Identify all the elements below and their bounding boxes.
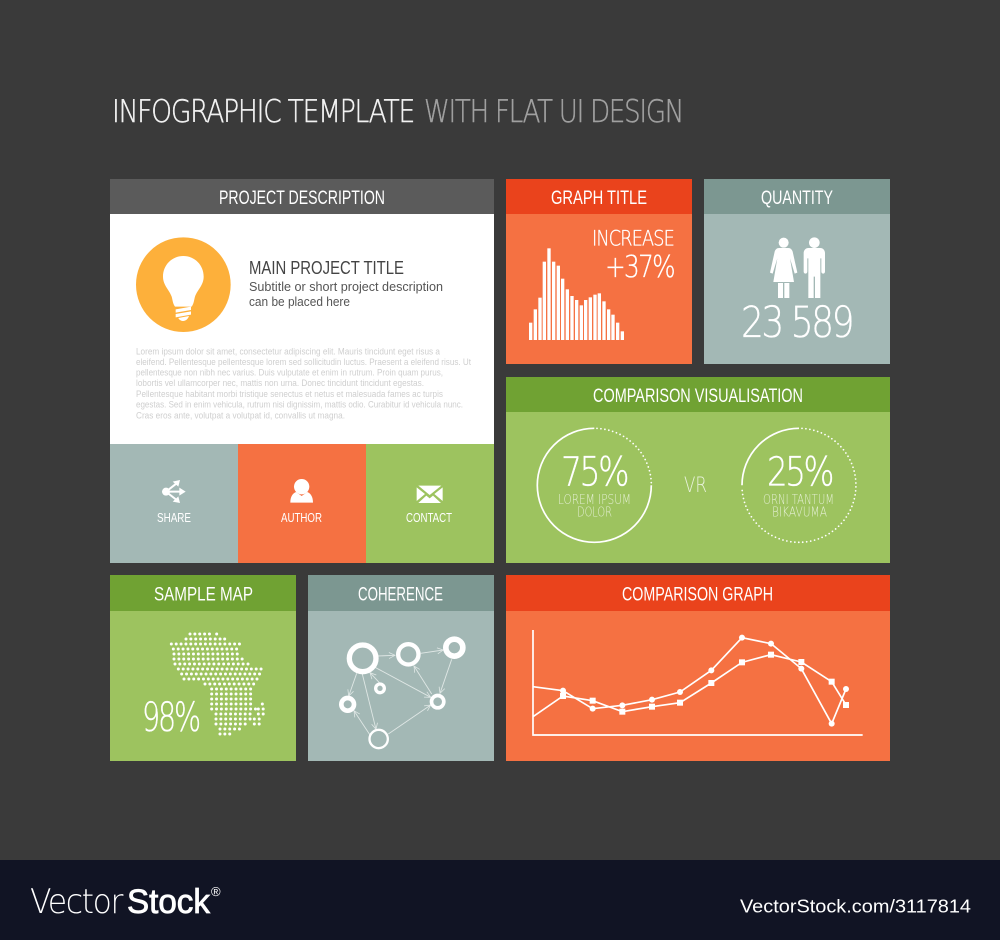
body text: pellentesque non nibh nec varius. Duis vulputate et enim in rutrum. Proin quam purus, xyxy=(136,368,443,378)
chart: 25 percent ring xyxy=(742,428,856,542)
footer logo: Vector xyxy=(30,882,123,922)
body text: egestas. Sed in enim vehicula, rutrum nisi dignissim, mattis odio. Curabitur id vehicula nunc. xyxy=(136,400,463,410)
versus label: VR xyxy=(684,473,707,497)
subtitle: Subtitle or short project description xyxy=(249,280,443,294)
title xyxy=(112,94,683,130)
heading: quantity: QUANTITY xyxy=(761,188,833,209)
body text: Lorem ipsum dolor sit amet, consectetur adipiscing elit. Mauris tincidunt eget risus a xyxy=(136,346,440,356)
subtitle: can be placed here xyxy=(249,295,350,309)
footer logo xyxy=(30,882,221,922)
panel: project description xyxy=(110,179,494,563)
heading: coherence: COHERENCE xyxy=(358,584,443,606)
heading: graph title: GRAPH TITLE xyxy=(551,188,647,209)
tile: author: AUTHOR xyxy=(281,511,322,525)
body text: Pellentesque habitant morbi tristique senectus et netus et malesuada fames ac turpis xyxy=(136,389,443,399)
tile: share xyxy=(110,444,238,563)
tile: contact: CONTACT xyxy=(406,511,452,525)
heading: comparison graph: COMPARISON GRAPH xyxy=(622,584,773,606)
title: WITH FLAT UI DESIGN xyxy=(424,94,683,130)
heading: sample map: SAMPLE MAP xyxy=(154,584,253,606)
panel: comparison graph xyxy=(506,575,890,761)
panel: comparison visualisation xyxy=(506,377,890,563)
chart: 75 percent ring: 75% xyxy=(561,450,628,496)
panel: coherence xyxy=(308,575,494,761)
icon: light bulb xyxy=(136,237,231,332)
chart: 25 percent ring: 25% xyxy=(767,450,833,496)
network diagram xyxy=(341,639,463,748)
tile: contact xyxy=(366,444,494,563)
map percentage: 98% xyxy=(142,695,200,741)
chart: 25 percent ring: ORNI TANTUM xyxy=(763,492,834,508)
panel: sample map xyxy=(110,575,296,761)
panel: graph title xyxy=(506,179,692,364)
icon: people xyxy=(770,237,825,298)
quantity number: 23 589 xyxy=(741,298,852,348)
chart: 75 percent ring: LOREM IPSUM xyxy=(558,492,631,508)
line chart xyxy=(533,630,863,735)
body text xyxy=(136,346,471,420)
increase label: INCREASE xyxy=(592,226,674,252)
body text: eleifend. Pellentesque pellentesque lorem sed sollicitudin luctus. Praesent a eleifend risus. Ut xyxy=(136,357,471,367)
panel: quantity xyxy=(704,179,890,364)
body text: lobortis vel ullamcorper nec, mattis non urna. Donec tincidunt tincidunt egestas. xyxy=(136,378,424,388)
heading: project description: PROJECT DESCRIPTION xyxy=(219,188,385,209)
chart: 25 percent ring: BIKAVUMA xyxy=(772,504,827,520)
title: INFOGRAPHIC TEMPLATE xyxy=(112,94,414,130)
tile: share: SHARE xyxy=(157,511,191,525)
chart: 75 percent ring: DOLOR xyxy=(577,504,612,520)
map: dotted africa xyxy=(171,634,264,734)
footer image id: VectorStock.com/3117814 xyxy=(740,896,971,916)
body text: Cras eros ante, volutpat a volutpat id, convallis ut magna. xyxy=(136,410,345,420)
subtitle xyxy=(249,280,443,309)
footer bar xyxy=(0,860,1000,940)
bar chart xyxy=(529,248,624,340)
chart: 75 percent ring xyxy=(537,428,651,542)
footer logo: ® xyxy=(211,884,221,899)
footer logo: Stock xyxy=(127,883,211,921)
main project title: MAIN PROJECT TITLE xyxy=(249,258,404,278)
tile: author xyxy=(238,444,366,563)
percentage: +37% xyxy=(605,250,674,285)
heading: comparison visualisation: COMPARISON VISUALISATION xyxy=(593,386,803,407)
